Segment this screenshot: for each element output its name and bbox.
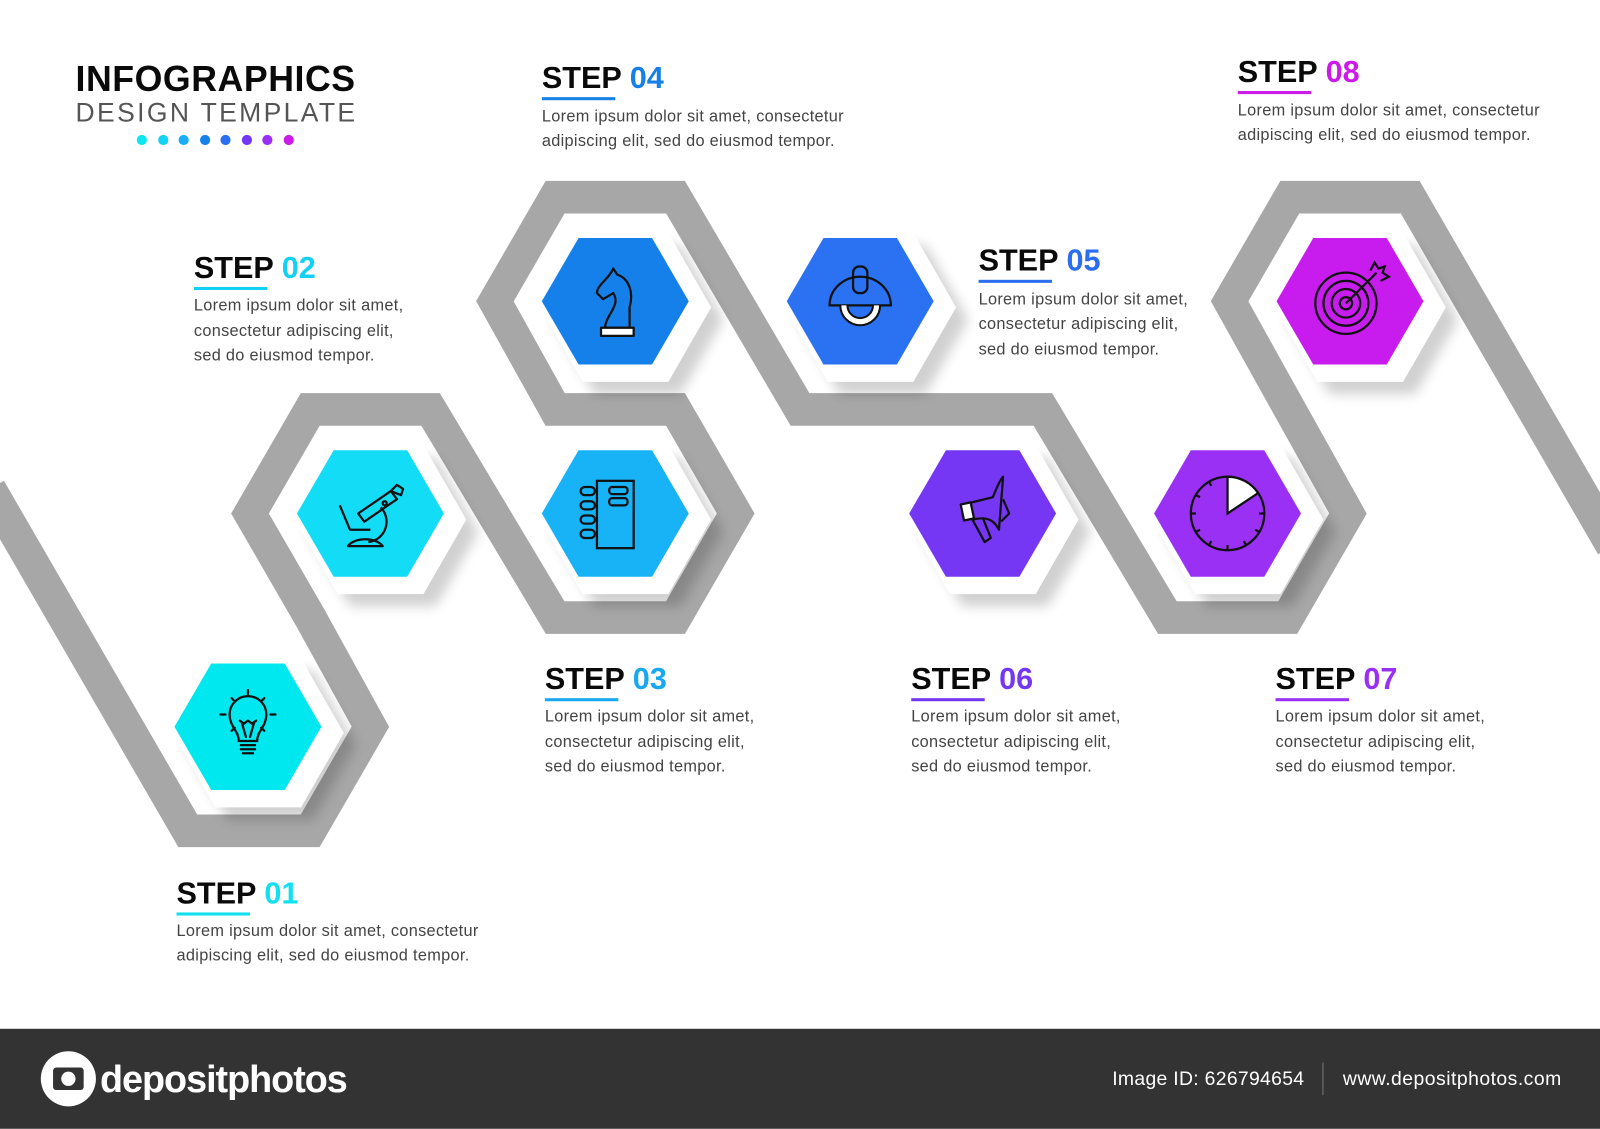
step 06 text: STEP 06 — [911, 662, 1033, 696]
step 02 text: consectetur adipiscing elit, — [194, 322, 394, 340]
icon: megaphone — [961, 477, 1009, 542]
footer id: Image ID: 626794654 — [1112, 1068, 1304, 1090]
step 08 text: adipiscing elit, sed do eiusmod tempor. — [1238, 126, 1531, 144]
step 01 text: STEP 01 — [177, 876, 298, 910]
title — [76, 59, 355, 145]
step 08 text — [1238, 55, 1540, 144]
icon: light bulb — [220, 690, 276, 753]
step 06 text: consectetur adipiscing elit, — [911, 733, 1111, 751]
footer bar: www.depositphotos.com — [1342, 1068, 1561, 1090]
step 01 text: adipiscing elit, sed do eiusmod tempor. — [177, 946, 470, 964]
hexagon: step 01 — [172, 658, 356, 820]
step 04 text: STEP 04 — [542, 61, 664, 95]
hexagon: step 04 — [540, 233, 723, 394]
step 08 text: STEP 08 — [1238, 55, 1360, 89]
icon: clock — [1191, 477, 1264, 550]
step 05 text: consectetur adipiscing elit, — [979, 315, 1178, 333]
step 06 text — [911, 662, 1121, 776]
step 01 text: Lorem ipsum dolor sit amet, consectetur — [177, 922, 479, 940]
icon: microscope — [340, 485, 403, 546]
step 07 text: Lorem ipsum dolor sit amet, — [1276, 708, 1485, 726]
hexagon: step 02 — [295, 445, 479, 606]
step 01 text — [177, 876, 479, 964]
step 06 text: Lorem ipsum dolor sit amet, — [911, 708, 1121, 726]
step 03 text: sed do eiusmod tempor. — [545, 758, 726, 776]
step 03 text: Lorem ipsum dolor sit amet, — [545, 708, 754, 726]
step 03 text: consectetur adipiscing elit, — [545, 733, 745, 751]
step 02 text: sed do eiusmod tempor. — [194, 346, 375, 364]
icon: helmet gear — [830, 267, 891, 322]
step 02 text — [194, 251, 403, 364]
hexagon: step 06 — [907, 445, 1091, 606]
step 07 text: consectetur adipiscing elit, — [1276, 733, 1475, 751]
hexagon: step 07 — [1152, 445, 1336, 606]
step 06 text: sed do eiusmod tempor. — [911, 758, 1092, 776]
step 07 text: sed do eiusmod tempor. — [1276, 758, 1456, 776]
icon: chess knight — [597, 269, 634, 336]
step 07 text — [1276, 662, 1485, 776]
grey hexagon chain path — [0, 197, 1600, 831]
step 04 text: adipiscing elit, sed do eiusmod tempor. — [542, 132, 835, 150]
hexagon: step 05 — [785, 233, 968, 394]
icon: target dart — [1315, 262, 1389, 334]
step 02 text: STEP 02 — [194, 251, 316, 285]
icon: notebook — [581, 481, 634, 548]
footer logo — [41, 1051, 347, 1106]
step 07 text: STEP 07 — [1276, 662, 1397, 696]
footer bar — [0, 1029, 1600, 1129]
step 04 text: Lorem ipsum dolor sit amet, consectetur — [542, 108, 844, 126]
step 05 text — [979, 244, 1188, 358]
step 05 text: Lorem ipsum dolor sit amet, — [979, 290, 1188, 308]
step 05 text: sed do eiusmod tempor. — [979, 340, 1159, 358]
step 08 text: Lorem ipsum dolor sit amet, consectetur — [1238, 102, 1540, 120]
title: INFOGRAPHICS — [76, 59, 355, 99]
step 05 text: STEP 05 — [979, 244, 1101, 278]
step 03 text: STEP 03 — [545, 662, 667, 696]
step 02 text: Lorem ipsum dolor sit amet, — [194, 296, 403, 314]
step 04 text — [542, 61, 844, 150]
color dots — [137, 135, 294, 145]
title: DESIGN TEMPLATE — [76, 98, 355, 128]
step 03 text — [545, 662, 754, 776]
hexagon: step 08 — [1274, 233, 1458, 394]
hexagon: step 03 — [540, 445, 723, 606]
footer logo: depositphotos — [100, 1058, 347, 1100]
